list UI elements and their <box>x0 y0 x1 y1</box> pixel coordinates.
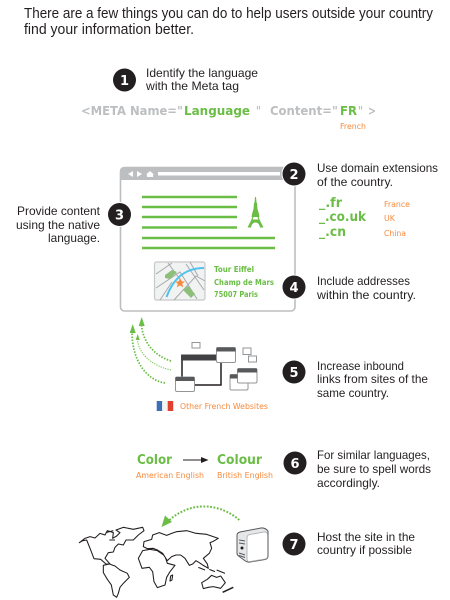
meta tag code sample: Content=" <box>270 103 338 118</box>
browser title bar <box>120 167 295 180</box>
step 3 text: Provide content <box>17 204 101 218</box>
step 1 text <box>145 66 258 93</box>
country names <box>384 200 410 238</box>
meta tag code sample: FR <box>340 103 357 118</box>
meta tag code sample: " <box>358 103 363 118</box>
step 4 text <box>316 274 416 302</box>
step 1 text: with the Meta tag <box>145 79 239 93</box>
Colour word: Colour <box>217 453 263 468</box>
step 6 text: accordingly. <box>317 476 380 490</box>
number badge 3: 3 <box>115 208 124 224</box>
domain extensions list: _.co.uk <box>319 209 367 225</box>
step 3 text <box>16 204 101 245</box>
country names: France <box>384 200 410 209</box>
French label: French <box>340 122 366 131</box>
country names: UK <box>384 214 396 223</box>
step 2 text: of the country. <box>317 175 393 189</box>
country names: China <box>384 229 406 238</box>
American English label: American English <box>136 471 204 480</box>
icon: French flag <box>157 401 173 411</box>
step 5 text: links from sites of the <box>317 372 428 386</box>
step 7: host the site <box>282 530 415 557</box>
title <box>24 6 434 38</box>
icon: Eiffel tower <box>248 197 264 228</box>
step 7 illustration: hosting <box>79 506 268 597</box>
step 2 text: Use domain extensions <box>317 161 438 175</box>
meta tag code sample: " <box>256 103 261 118</box>
meta tag code sample: <META Name=" <box>81 103 183 118</box>
dotted green arrows <box>130 317 171 383</box>
step 6 text <box>317 448 431 490</box>
step 3 text: language. <box>48 231 100 245</box>
step 3 text: using the native <box>16 218 100 232</box>
number badge 6: 6 <box>290 457 300 472</box>
dotted green arrow to map <box>162 506 239 527</box>
website windows icon <box>176 342 257 392</box>
step 4: addresses <box>282 274 416 302</box>
domain extensions list <box>319 195 367 240</box>
step 2: domain extensions <box>282 161 438 240</box>
arrow <box>183 457 208 463</box>
step 5 text: Increase inbound <box>317 359 404 373</box>
step 6 illustration: spelling <box>136 453 273 480</box>
number badge 1: 1 <box>120 74 129 89</box>
number badge 2 <box>282 162 306 186</box>
meta tag code sample <box>81 103 376 118</box>
step 7 text <box>317 530 415 557</box>
number badge 5: 5 <box>289 366 299 381</box>
icon: server box <box>237 528 268 562</box>
green text lines <box>142 197 275 248</box>
number badge 5 <box>282 360 306 384</box>
world map <box>79 527 233 597</box>
step 6 text: be sure to spell words <box>317 462 431 476</box>
step 4 text: Include addresses <box>317 274 410 288</box>
number badge 4: 4 <box>289 281 299 296</box>
step 4 text: within the country. <box>316 288 416 302</box>
step 6: similar languages <box>284 448 431 490</box>
step 2 text <box>317 161 438 189</box>
number badge 1 <box>113 68 136 92</box>
step 1: meta tag <box>81 66 376 131</box>
step 5 illustration: inbound links <box>130 317 268 411</box>
step 5 text <box>317 359 428 400</box>
number badge 7: 7 <box>289 538 299 553</box>
map thumbnail <box>154 262 205 300</box>
address text: 75007 Paris <box>214 290 258 299</box>
number badge 6 <box>284 452 306 474</box>
title: find your information better. <box>24 22 194 38</box>
step 6 text: For similar languages, <box>317 448 430 462</box>
address text <box>214 265 274 299</box>
meta tag code sample: > <box>368 103 376 118</box>
step 5 text: same country. <box>317 386 389 400</box>
Color word: Color <box>137 453 173 468</box>
domain extensions list: _.cn <box>319 224 346 240</box>
address text: Tour Eiffel <box>214 265 254 274</box>
address text: Champ de Mars <box>214 278 274 287</box>
step 3: native language <box>16 202 132 245</box>
domain extensions list: _.fr <box>319 195 342 211</box>
step 5: inbound links <box>282 359 428 400</box>
British English label: British English <box>217 471 273 480</box>
browser window illustration <box>120 167 295 311</box>
step 7 text: country if possible <box>317 543 412 557</box>
number badge 2: 2 <box>289 168 299 183</box>
Other French Websites label: Other French Websites <box>180 402 268 411</box>
step 7 text: Host the site in the <box>317 530 415 544</box>
meta tag code sample: Language <box>184 103 250 118</box>
step 1 text: Identify the language <box>146 66 258 80</box>
